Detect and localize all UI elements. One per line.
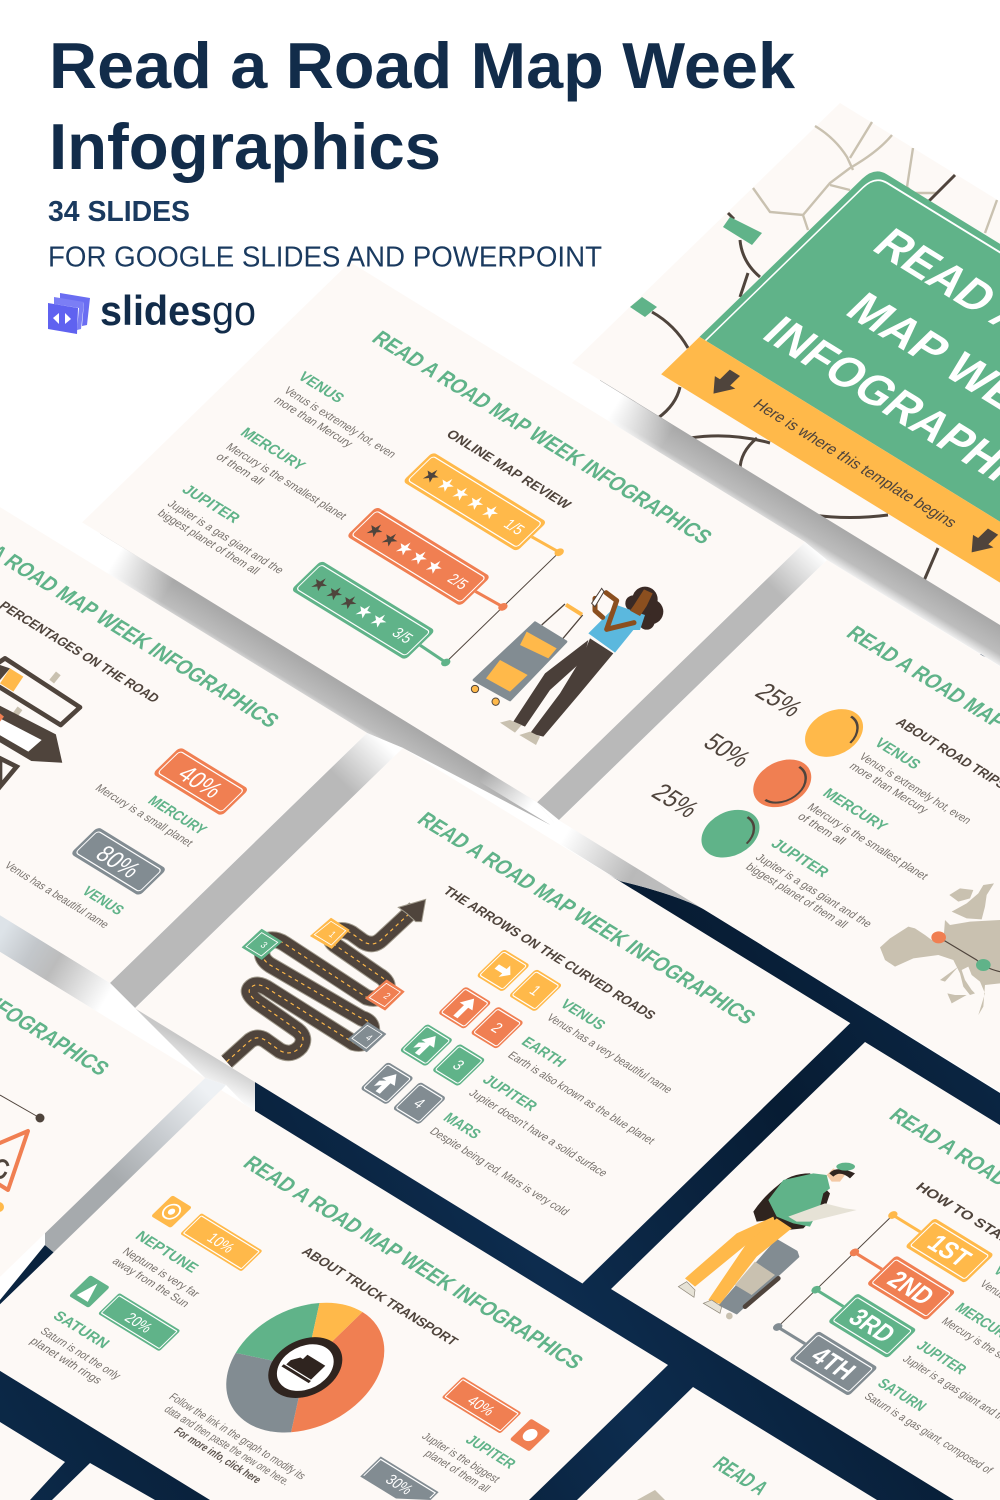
- text block: venus: VENUS: [871, 735, 925, 772]
- row: jupiter: Jupiter doesn't have a solid surface: [466, 1087, 610, 1179]
- text block: venus: [271, 368, 416, 470]
- shadow beside sign slide: [45, 1078, 226, 1262]
- item: saturn 20 percent: [22, 1275, 181, 1397]
- rating bar: three of five: 3/5: [388, 625, 416, 647]
- slide: percentages on the road: [0, 453, 367, 983]
- step: third: JUPITER: [913, 1337, 971, 1377]
- title: Read a Road Map Week: [49, 29, 796, 102]
- step: second: 2ND: [881, 1267, 940, 1311]
- slide: about truck transport: [21, 1138, 611, 1500]
- badge: 40 percent: [152, 747, 249, 816]
- slide: arrows on the curved roads: [135, 748, 850, 1284]
- subtitle: format: FOR GOOGLE SLIDES AND POWERPOINT: [48, 242, 602, 274]
- percentage: 25 jupiter: 25%: [645, 779, 704, 823]
- item: 30 percent: [360, 1457, 439, 1500]
- panel background: lower right slide: [577, 1387, 877, 1500]
- item: neptune 10 percent: Neptune is very far: [119, 1246, 202, 1300]
- rating bar: two of five: ★: [419, 554, 450, 579]
- text block: mercury: MERCURY: [237, 424, 310, 474]
- rating bar: one of five: ★: [475, 499, 506, 525]
- item: saturn 20 percent: planet with rings: [27, 1336, 105, 1387]
- slide corners: lower left: [0, 1422, 155, 1500]
- beige shape at lower right slide: [637, 1490, 665, 1500]
- title: [49, 29, 796, 183]
- pie chart with truck icon: [194, 1278, 417, 1457]
- item: jupiter 40 percent: planet of them all: [422, 1448, 493, 1495]
- rating bar: two of five: ★: [375, 527, 406, 552]
- text block: venus: VENUS: [79, 883, 128, 918]
- slide subtitle: ABOUT ROAD TRIPS: [893, 715, 1000, 792]
- map of europe with route: [880, 883, 1000, 1015]
- item: 30 percent: 30%: [381, 1472, 416, 1498]
- badge: 40 percent: 40%: [171, 762, 228, 804]
- text block: venus: Venus is extremely hot, even: [281, 385, 399, 461]
- item: neptune 10 percent: [104, 1195, 263, 1317]
- row: mars: 4: [409, 1096, 428, 1112]
- text block: venus: more than Mercury: [846, 761, 931, 816]
- slide: cover road sign: Here is where this template begins: [749, 397, 960, 531]
- row: mars: MARS: [440, 1109, 485, 1142]
- item: saturn 20 percent: 20%: [121, 1310, 155, 1336]
- percentage: 50 mercury: 50%: [697, 729, 756, 773]
- row: venus: 1: [525, 983, 544, 999]
- navy backdrop behind the slides: [0, 628, 1000, 1500]
- text block: mercury: Mercury is the smallest planet: [223, 441, 349, 522]
- text block: venus: VENUS: [295, 368, 348, 406]
- step: fourth: SATURN: [874, 1375, 930, 1414]
- text block: jupiter: JUPITER: [768, 835, 833, 880]
- shadow under arrows slide: [135, 1008, 255, 1115]
- illustration: winding road with numbered signs: 3: [258, 940, 270, 950]
- rating bar: one of five: ★: [416, 463, 447, 488]
- text block: venus: [846, 734, 991, 836]
- rating bar: one of five: 1/5: [500, 517, 528, 539]
- slide: how to start: [697, 1105, 1000, 1500]
- slide: online map review: [82, 262, 805, 802]
- text block: jupiter: Jupiter is a gas giant and the: [753, 852, 874, 930]
- slide subtitle: ONLINE MAP REVIEW: [443, 427, 575, 512]
- text block: venus: Venus has a beautiful name: [2, 860, 112, 931]
- item: saturn 20 percent: SATURN: [50, 1308, 114, 1351]
- text block: mercury: of them all: [794, 811, 848, 847]
- illustration: winding road with numbered signs: 4: [363, 1033, 375, 1043]
- step: third: 3RD: [842, 1305, 901, 1348]
- item: jupiter 40 percent: 40%: [463, 1393, 498, 1419]
- text block: mercury: Mercury is the smallest planet: [804, 801, 931, 882]
- chart note: Follow the link in the graph to modify its: [166, 1391, 308, 1482]
- illustration: winding road with numbered signs: 1: [327, 929, 338, 939]
- slide subtitle: PERCENTAGES ON THE ROAD: [0, 599, 163, 706]
- subtitle: slide count: 34 SLIDES: [48, 196, 190, 228]
- slide subtitle: ABOUT TRUCK TRANSPORT: [298, 1244, 462, 1349]
- shadow under cover slide: [596, 378, 1000, 666]
- timeline connectors: [771, 1210, 924, 1347]
- text block: mercury: of them all: [213, 451, 267, 488]
- text block: jupiter: [743, 835, 892, 940]
- row: earth: [435, 986, 678, 1147]
- text block: mercury: MERCURY: [819, 785, 892, 834]
- step: second: [867, 1255, 1000, 1393]
- shadow under online map slide: [96, 531, 562, 832]
- text block: venus: [2, 844, 128, 931]
- item: neptune 10 percent: NEPTUNE: [132, 1228, 203, 1276]
- rating bar: three of five: ★: [304, 571, 336, 597]
- item: neptune 10 percent: away from the Sun: [109, 1256, 192, 1310]
- text block: mercury: [794, 784, 948, 892]
- illustration: winding road with numbered signs: 2: [381, 991, 393, 1001]
- rating bar: three of five: ★: [349, 598, 380, 624]
- step: fourth: [789, 1331, 1000, 1479]
- rating bar: one of five: ★: [460, 490, 491, 516]
- text block: mercury: Mercury is a small planet: [92, 782, 196, 849]
- illustration: winding road with numbered signs: [227, 899, 426, 1062]
- row: jupiter: [396, 1024, 631, 1179]
- item: neptune 10 percent: 10%: [203, 1231, 237, 1257]
- panel background: how to start slide: [611, 1042, 1000, 1500]
- text block: mercury: [92, 768, 211, 849]
- slide title: READ A ROAD MAP WEEK INFOGRAPHICS: [238, 1153, 588, 1374]
- connector lines: [416, 533, 566, 668]
- slide: sign slide (partly visible): [0, 798, 205, 1338]
- row: earth: EARTH: [518, 1033, 570, 1070]
- text block: venus: more than Mercury: [271, 395, 356, 450]
- rating bar: two of five: ★: [389, 535, 420, 561]
- row: jupiter: 3: [448, 1058, 467, 1074]
- shadow under percentages slide: [0, 915, 205, 1078]
- rating bar: one of five: [403, 452, 547, 552]
- step: fourth: Saturn is a gas giant, composed of: [861, 1391, 995, 1476]
- text block: venus: Venus is extremely hot, even: [856, 751, 974, 827]
- title: Infographics: [49, 110, 441, 183]
- text block: jupiter: [155, 481, 304, 586]
- item: jupiter 40 percent: Jupiter is the biggest: [419, 1431, 502, 1485]
- panel background: truck transport slide: [0, 1090, 668, 1500]
- illustration: woman with suitcase and phone: [471, 587, 663, 745]
- item: saturn 20 percent: Saturn is not the only: [37, 1326, 124, 1382]
- rating bar: two of five: [346, 507, 491, 606]
- step: fourth: 4TH: [804, 1343, 861, 1385]
- step: third: [828, 1293, 1000, 1446]
- row: mars: Despite being red, Mars is very cold: [427, 1126, 572, 1218]
- logo: slidesgo: slidesgo: [100, 287, 256, 334]
- text block: mercury: MERCURY: [145, 792, 211, 838]
- rating bar: three of five: ★: [334, 589, 365, 615]
- row: venus: VENUS: [557, 996, 610, 1033]
- slide title: READ A ROAD MAP WEEK INFOGRAPHICS: [412, 809, 760, 1029]
- text block: jupiter: biggest planet of them all: [155, 508, 262, 577]
- badge: 80 percent: [70, 827, 167, 896]
- item: jupiter 40 percent: JUPITER: [462, 1432, 520, 1471]
- text block: jupiter: Jupiter is a gas giant and the: [164, 498, 286, 577]
- slide: about road trips: [559, 560, 1000, 1100]
- rating bar: two of five: ★: [360, 517, 391, 543]
- row: venus: Venus has a very beautiful name: [544, 1012, 675, 1096]
- chart note: For more info, click here: [171, 1425, 264, 1486]
- rating bar: one of five: ★: [445, 481, 477, 506]
- text block: jupiter: JUPITER: [179, 481, 244, 526]
- percentage: 50 mercury: [688, 718, 823, 816]
- rating bar: two of five: ★: [404, 545, 435, 570]
- row: mars: [357, 1062, 593, 1218]
- rating bar: three of five: ★: [364, 608, 395, 633]
- text block: jupiter: biggest planet of them all: [743, 861, 850, 931]
- illustration: road sign post: [0, 658, 80, 787]
- percentage: 25 venus: 25%: [749, 679, 808, 723]
- percentage: 25 venus: [740, 668, 875, 766]
- chart note: data and then paste the new one here.: [161, 1404, 292, 1488]
- step: first: [905, 1218, 1000, 1366]
- rating bar: two of five: 2/5: [443, 571, 471, 593]
- shadow under road trip slide: [538, 820, 715, 916]
- shadow right of online map slide: [537, 542, 827, 820]
- text block: mercury: [213, 424, 367, 532]
- row: jupiter: JUPITER: [479, 1071, 541, 1114]
- badge: 80 percent: 80%: [89, 841, 146, 883]
- slide title: READ A ROAD MAP WEEK INFOGRAPHICS: [367, 328, 716, 549]
- step: first: 1ST: [921, 1230, 977, 1272]
- row: earth: 2: [487, 1020, 506, 1037]
- illustration: traveller reading a map: [678, 1163, 857, 1319]
- row: venus: [474, 949, 696, 1096]
- rating bar: one of five: ★: [431, 472, 462, 497]
- rating bar: three of five: [291, 560, 435, 660]
- shadow right of percentages slide: [110, 733, 403, 1008]
- rating bar: three of five: ★: [319, 580, 350, 606]
- slide subtitle: THE ARROWS ON THE CURVED ROADS: [440, 884, 659, 1022]
- row: earth: Earth is also known as the blue planet: [505, 1050, 657, 1147]
- item: jupiter 40 percent: [396, 1377, 551, 1495]
- percentage: 25 jupiter: [636, 768, 771, 866]
- slide: cover road sign: [572, 103, 1000, 647]
